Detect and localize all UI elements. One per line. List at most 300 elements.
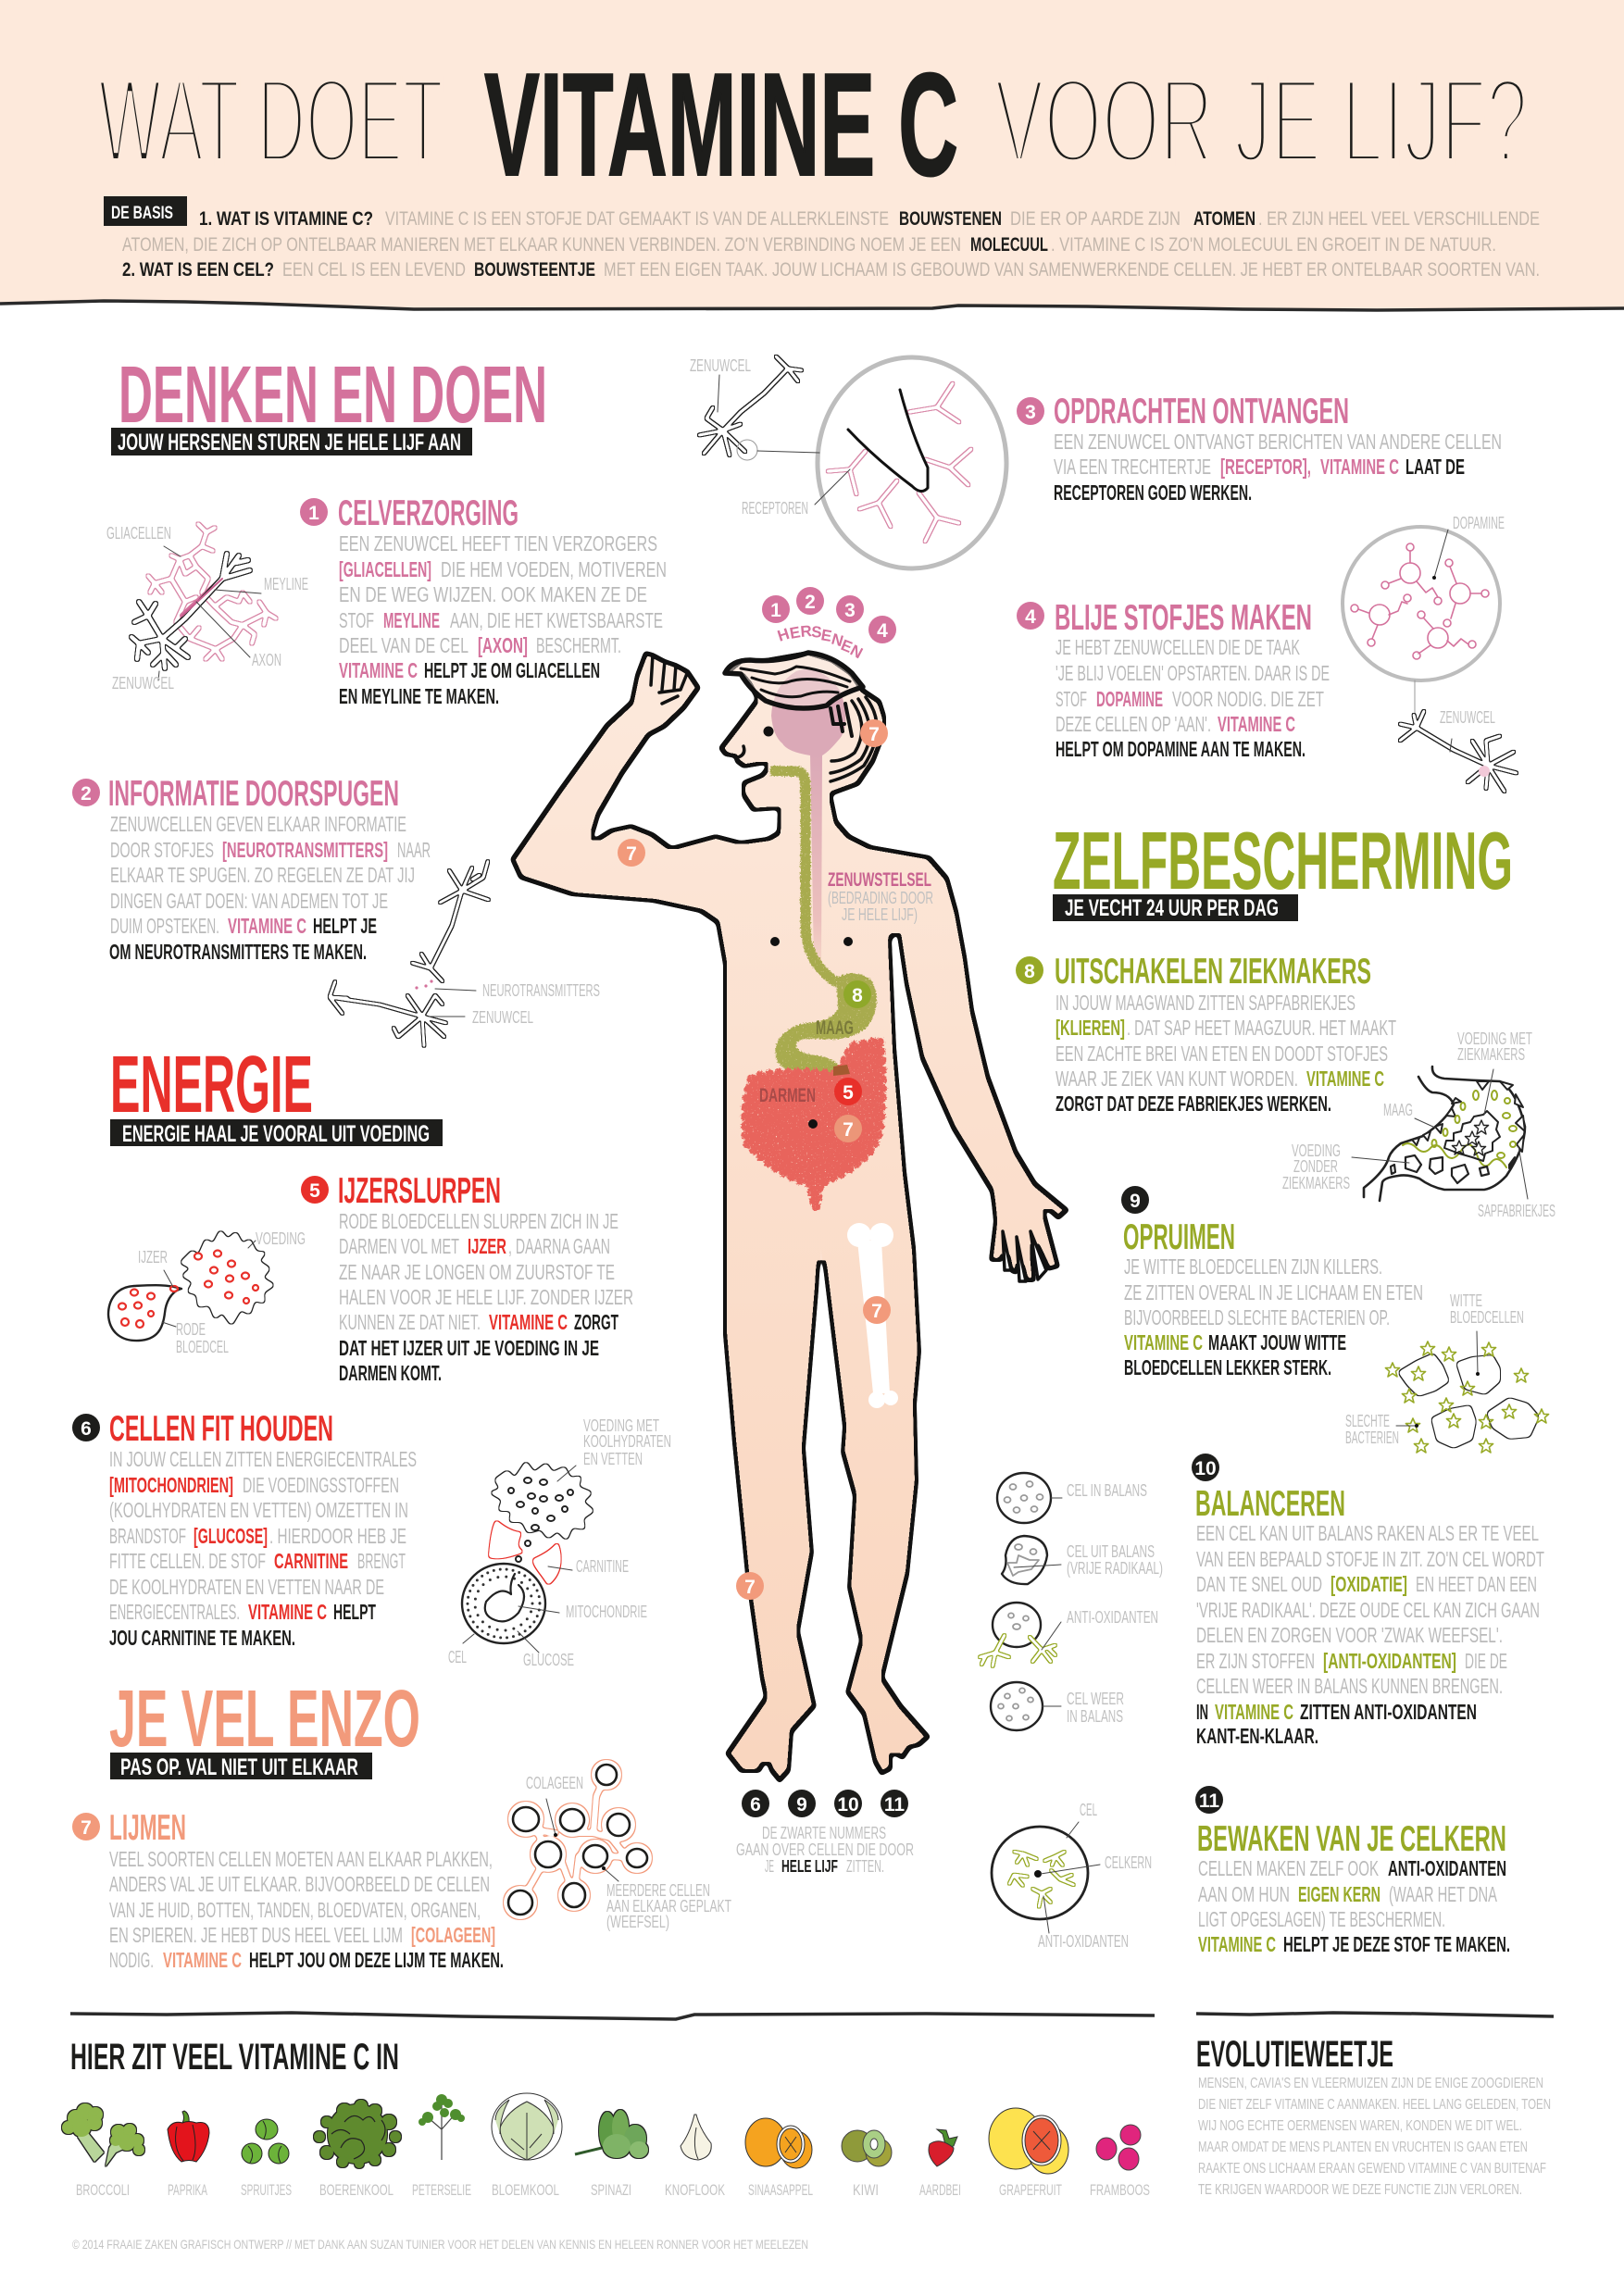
- labels: opruimen: SLECHTE: [1345, 1412, 1390, 1430]
- text: celverzorging: EN MEYLINE TE MAKEN.: [339, 684, 499, 708]
- intro: de basis: 2. WAT IS EEN CEL?: [122, 259, 274, 281]
- labels: celkern: CEL: [1080, 1801, 1097, 1819]
- text: cellen fit houden: HELPT: [333, 1600, 376, 1624]
- leg bone: [847, 1223, 898, 1408]
- heading: uitschakelen ziekmakers: UITSCHAKELEN ZIEKMAKERS: [1055, 952, 1371, 992]
- body labels: MAAG: [816, 1017, 854, 1039]
- heading: lijmen: LIJMEN: [109, 1808, 186, 1848]
- labels: balans cellen: CEL UIT BALANS: [1067, 1542, 1155, 1561]
- text: cellen fit houden: [109, 1447, 417, 1650]
- text: opdrachten ontvangen: VIA EEN TRECHTERTJE: [1054, 455, 1211, 479]
- text: ijzerslurpen: KUNNEN ZE DAT NIET.: [339, 1310, 481, 1334]
- heading: opdrachten ontvangen: OPDRACHTEN ONTVANGEN: [1054, 392, 1349, 431]
- text: balanceren: IN: [1196, 1700, 1208, 1724]
- icon: witte bloedcellen en bacterien: [1385, 1331, 1549, 1453]
- text: informatie doorspugen: OM NEUROTRANSMITTERS TE MAKEN.: [109, 940, 367, 964]
- badge 8: [1016, 956, 1043, 984]
- food: knoflook: [681, 2115, 711, 2160]
- text: cellen fit houden: [MITOCHONDRIEN]: [109, 1473, 233, 1497]
- intro: de basis: . ER ZIJN HEEL VEEL VERSCHILLENDE: [1258, 208, 1540, 230]
- text: balanceren: [1196, 1521, 1544, 1748]
- heading: je vel enzo: [109, 1674, 420, 1780]
- labels: celkern: [1038, 1801, 1152, 1951]
- heading: evolutieweetje: EVOLUTIEWEETJE: [1196, 2034, 1393, 2075]
- heading: energie: ENERGIE: [110, 1040, 313, 1129]
- panel: 4 blije stofjes maken: [1017, 514, 1517, 792]
- labels: lijmen: AAN ELKAAR GEPLAKT: [606, 1897, 731, 1915]
- text: ijzerslurpen: [339, 1209, 633, 1385]
- text: cellen fit houden: IN JOUW CELLEN ZITTEN ENERGIECENTRALES: [109, 1447, 417, 1471]
- heading: je vel enzo: PAS OP. VAL NIET UIT ELKAAR: [120, 1754, 358, 1780]
- text: ijzerslurpen: , DAARNA GAAN: [508, 1234, 610, 1258]
- text: lijmen: [COLAGEEN]: [411, 1923, 495, 1947]
- copyright: © 2014 FRAAIE ZAKEN GRAFISCH ONTWERP // MET DANK AAN SUZAN TUINIER VOOR HET DELEN VAN KENNIS EN HELEEN RONNER VOOR HET MEELEZEN: [72, 2237, 808, 2252]
- text: lijmen: [109, 1847, 504, 1972]
- text: opruimen: ZE ZITTEN OVERAL IN JE LICHAAM EN ETEN: [1124, 1280, 1423, 1304]
- heading: denken en doen: JOUW HERSENEN STUREN JE HELE LIJF AAN: [118, 430, 461, 455]
- badge 4: [1017, 602, 1044, 630]
- labels: lijmen: [526, 1774, 731, 1931]
- text: celverzorging: AAN, DIE HET KWETSBAARSTE: [450, 608, 663, 632]
- body labels: ZENUWSTELSEL: [828, 869, 931, 891]
- panel: hier zit veel vitamine c in: [62, 2013, 1155, 2199]
- text: ijzerslurpen: HALEN VOOR JE HELE LIJF. ZONDER IJZER: [339, 1285, 633, 1309]
- text: uitschakelen ziekmakers: IN JOUW MAAGWAND ZITTEN SAPFABRIEKJES: [1056, 991, 1355, 1015]
- heading: denken en doen: DENKEN EN DOEN: [119, 350, 547, 440]
- badges on body: 5: [843, 1082, 854, 1104]
- badge 11: 11: [1199, 1791, 1219, 1812]
- labels: neurotransmitters, zenuwcel: NEUROTRANSMITTERS: [482, 981, 600, 1000]
- food labels: PAPRIKA: [168, 2181, 207, 2199]
- text: cellen fit houden: DIE VOEDINGSSTOFFEN: [243, 1473, 399, 1497]
- hersenen badges: 2: [805, 592, 816, 613]
- heading: ijzerslurpen: IJZERSLURPEN: [338, 1171, 501, 1211]
- food: aardbei: [929, 2129, 957, 2166]
- badge 7: 7: [81, 1817, 92, 1839]
- text: ijzerslurpen: IJZER: [468, 1234, 506, 1258]
- text: lijmen: VEEL SOORTEN CELLEN MOETEN AAN ELKAAR PLAKKEN,: [109, 1847, 493, 1871]
- food labels: KIWI: [853, 2181, 879, 2199]
- text: balanceren: ER ZIJN STOFFEN: [1196, 1649, 1315, 1673]
- labels: maag: ZONDER: [1293, 1157, 1338, 1176]
- text: informatie doorspugen: ZENUWCELLEN GEVEN ELKAAR INFORMATIE: [110, 812, 406, 836]
- badge 11: [1195, 1786, 1223, 1814]
- labels: ijzerslurpen: BLOEDCEL: [176, 1338, 229, 1356]
- badge 7: [72, 1813, 100, 1841]
- text: lijmen: ANDERS VAL JE UIT ELKAAR. BIJVOORBEELD DE CELLEN: [109, 1872, 490, 1896]
- black number legend: DE ZWARTE NUMMERS: [762, 1824, 886, 1842]
- icon: dopamine en zenuwcel: [1343, 527, 1517, 792]
- food labels: AARDBEI: [919, 2181, 961, 2199]
- text: opdrachten ontvangen: RECEPTOREN GOED WERKEN.: [1054, 480, 1252, 505]
- labels: neurotransmitters, zenuwcel: [472, 981, 600, 1027]
- badges on body: 7: [868, 724, 880, 745]
- labels: cellen fit houden: CARNITINE: [576, 1557, 629, 1576]
- text: balanceren: [ANTI-OXIDANTEN]: [1323, 1649, 1456, 1673]
- labels: ijzerslurpen: VOEDING: [256, 1229, 306, 1248]
- food labels: BOERENKOOL: [319, 2181, 394, 2199]
- badges on body: 8: [852, 985, 863, 1006]
- body labels: DARMEN: [759, 1085, 816, 1106]
- food labels: PETERSELIE: [412, 2181, 471, 2199]
- labels: cellen fit houden: GLUCOSE: [523, 1651, 574, 1669]
- title: [98, 44, 1528, 206]
- labels: ijzerslurpen: [138, 1229, 306, 1356]
- text: uitschakelen ziekmakers: [1056, 991, 1396, 1116]
- text: blije stofjes maken: 'JE BLIJ VOELEN' OPSTARTEN. DAAR IS DE: [1056, 661, 1330, 685]
- text: uitschakelen ziekmakers: . DAT SAP HEET MAAGZUUR. HET MAAKT: [1127, 1016, 1396, 1040]
- badges on body: [618, 719, 891, 1600]
- food: boerenkool: [314, 2100, 401, 2168]
- food labels: FRAMBOOS: [1090, 2181, 1150, 2199]
- text: cellen fit houden: JOU CARNITINE TE MAKEN.: [109, 1626, 295, 1650]
- badges on body: 7: [744, 1577, 756, 1598]
- heading: celverzorging: CELVERZORGING: [338, 493, 518, 533]
- text: celverzorging: [GLIACELLEN]: [339, 557, 431, 581]
- text: cellen fit houden: ENERGIECENTRALES.: [109, 1600, 240, 1624]
- intro: de basis: EEN CEL IS EEN LEVEND: [282, 259, 466, 281]
- text: balanceren: ZITTEN ANTI-OXIDANTEN: [1300, 1700, 1477, 1724]
- text: uitschakelen ziekmakers: [KLIEREN]: [1056, 1016, 1125, 1040]
- text: informatie doorspugen: DUIM OPSTEKEN.: [110, 914, 219, 938]
- text: celverzorging: DIE HEM VOEDEN, MOTIVEREN: [441, 557, 667, 581]
- labels: opruimen: WITTE: [1450, 1292, 1482, 1310]
- text: celverzorging: EEN ZENUWCEL HEEFT TIEN VERZORGERS: [339, 531, 657, 555]
- hair: [725, 653, 877, 781]
- heading: informatie doorspugen: INFORMATIE DOORSPUGEN: [108, 774, 399, 814]
- black number legend: GAAN OVER CELLEN DIE DOOR: [736, 1841, 914, 1859]
- badge 1: 1: [308, 503, 319, 524]
- food labels: BROCCOLI: [76, 2181, 130, 2199]
- food: sinaasappel: [745, 2118, 812, 2168]
- text: celverzorging: DEEL VAN DE CEL: [339, 633, 468, 657]
- food: paprika: [168, 2111, 209, 2162]
- text: blije stofjes maken: [1056, 635, 1330, 761]
- panel: evolutieweetje: [1196, 2013, 1554, 2198]
- panel: 1 celverzorging: [106, 493, 667, 708]
- finger gaps: [1003, 1231, 1046, 1281]
- face details and fist lines: [651, 655, 853, 1129]
- food labels: KNOFLOOK: [665, 2181, 725, 2199]
- brain and spinal cord: [771, 669, 845, 963]
- hersenen badges: 1: [770, 600, 781, 621]
- badge 2: 2: [81, 783, 92, 805]
- text: opdrachten ontvangen: [1054, 430, 1502, 505]
- labels: maag: SAPFABRIEKJES: [1478, 1202, 1555, 1220]
- labels: opruimen: BACTERIEN: [1345, 1429, 1399, 1447]
- text: bewaken van je celkern: ANTI-OXIDANTEN: [1388, 1856, 1506, 1880]
- text: ijzerslurpen: RODE BLOEDCELLEN SLURPEN ZICH IN JE: [339, 1209, 618, 1233]
- badge 5: 5: [309, 1180, 320, 1202]
- food labels: SPRUITJES: [241, 2181, 292, 2199]
- text: evolutieweetje: [1198, 2076, 1551, 2198]
- text: opruimen: VITAMINE C: [1124, 1330, 1203, 1354]
- black number legend: 10: [837, 1794, 859, 1816]
- text: ijzerslurpen: DAT HET IJZER UIT JE VOEDING IN JE: [339, 1336, 599, 1360]
- food labels: [76, 2181, 1150, 2199]
- labels: balans cellen: ANTI-OXIDANTEN: [1067, 1608, 1158, 1627]
- labels: dopamine, zenuwcel: DOPAMINE: [1453, 514, 1505, 532]
- labels: celkern: ANTI-OXIDANTEN: [1038, 1932, 1129, 1951]
- badge 9: [1121, 1186, 1149, 1214]
- labels: lijmen: (WEEFSEL): [606, 1913, 669, 1931]
- text: balanceren: [OXIDATIE]: [1330, 1572, 1407, 1596]
- digestive tract: [770, 771, 877, 1076]
- intro: de basis: DE BASIS: [111, 204, 173, 223]
- panel: 9 opruimen: [1121, 1186, 1549, 1453]
- badge 8: 8: [1024, 961, 1035, 982]
- labels: celkern: CELKERN: [1105, 1853, 1152, 1872]
- icon: maag: [1352, 1067, 1528, 1201]
- text: balanceren: EN HEET DAN EEN: [1416, 1572, 1537, 1596]
- badge 6: [72, 1414, 100, 1441]
- text: ijzerslurpen: ZORGT: [574, 1310, 618, 1334]
- text: cellen fit houden: (KOOLHYDRATEN EN VETTEN) OMZETTEN IN: [109, 1498, 408, 1522]
- badge 6: 6: [81, 1418, 92, 1440]
- labels: celverzorging: AXON: [252, 651, 281, 669]
- food: broccoli: [62, 2103, 144, 2166]
- black number legend: 6: [750, 1794, 761, 1816]
- panel: 5 ijzerslurpen: [108, 1171, 633, 1385]
- text: bewaken van je celkern: [1198, 1856, 1510, 1956]
- labels: receptoren: ZENUWCEL: [690, 356, 751, 375]
- labels: opruimen: BLOEDCELLEN: [1450, 1308, 1524, 1327]
- hersenen badges: 3: [844, 600, 856, 621]
- labels: celverzorging: ZENUWCEL: [112, 674, 174, 693]
- text: informatie doorspugen: DOOR STOFJES: [110, 838, 214, 862]
- heading: blije stofjes maken: BLIJE STOFJES MAKEN: [1055, 598, 1312, 638]
- labels: lijmen: COLAGEEN: [526, 1774, 583, 1792]
- header band: [0, 0, 1624, 310]
- food: bloemkool: [492, 2093, 562, 2160]
- text: blije stofjes maken: STOF: [1056, 687, 1087, 711]
- intro: de basis: 1. WAT IS VITAMINE C?: [199, 208, 373, 230]
- text: informatie doorspugen: VITAMINE C: [228, 914, 306, 938]
- body labels: [759, 869, 933, 1106]
- labels: balans cellen: (VRIJE RADIKAAL): [1067, 1559, 1163, 1578]
- badge 3: 3: [1025, 402, 1036, 423]
- labels: celverzorging: [106, 524, 308, 693]
- labels: cellen fit houden: MITOCHONDRIE: [566, 1603, 647, 1621]
- labels: receptoren: [690, 356, 808, 518]
- heading: cellen fit houden: CELLEN FIT HOUDEN: [109, 1409, 333, 1449]
- labels: maag: VOEDING MET: [1457, 1029, 1532, 1048]
- labels: cellen fit houden: EN VETTEN: [583, 1450, 643, 1468]
- hersenen badges: 4: [877, 620, 888, 642]
- text: opdrachten ontvangen: [RECEPTOR],: [1220, 455, 1311, 479]
- labels: cellen fit houden: CEL: [448, 1648, 467, 1666]
- labels: balans cellen: IN BALANS: [1067, 1707, 1123, 1726]
- black number legend: JE: [765, 1857, 774, 1876]
- food labels: SINAASAPPEL: [748, 2181, 813, 2199]
- badges on body: 7: [626, 843, 637, 865]
- hersenen badges: HERSENEN: [775, 622, 866, 662]
- intro: de basis: . VITAMINE C IS ZO'N MOLECUUL EN GROEIT IN DE NATUUR.: [1051, 234, 1496, 256]
- badge 3: [1017, 397, 1044, 425]
- text: celverzorging: HELPT JE OM GLIACELLEN: [424, 658, 600, 682]
- panel: 2 informatie doorspugen: [72, 774, 600, 1046]
- text: uitschakelen ziekmakers: EEN ZACHTE BREI VAN ETEN EN DOODT STOFJES: [1056, 1042, 1388, 1066]
- text: bewaken van je celkern: AAN OM HUN: [1198, 1882, 1290, 1906]
- text: balanceren: VITAMINE C: [1215, 1700, 1293, 1724]
- text: blije stofjes maken: HELPT OM DOPAMINE AAN TE MAKEN.: [1056, 737, 1305, 761]
- black number legend: HELE LIJF: [781, 1857, 838, 1876]
- labels: ijzerslurpen: IJZER: [138, 1248, 168, 1267]
- text: blije stofjes maken: VITAMINE C: [1218, 712, 1295, 736]
- labels: balans cellen: CEL IN BALANS: [1067, 1481, 1147, 1500]
- text: cellen fit houden: . HIERDOOR HEB JE: [269, 1524, 406, 1548]
- text: cellen fit houden: VITAMINE C: [248, 1600, 327, 1624]
- labels: receptoren: RECEPTOREN: [742, 499, 808, 518]
- text: blije stofjes maken: DOPAMINE: [1096, 687, 1163, 711]
- intro: de basis: [104, 196, 1540, 281]
- badge 5: [301, 1176, 329, 1204]
- icon: cellen aan elkaar geplakt: [506, 1763, 649, 1916]
- text: cellen fit houden: DE KOOLHYDRATEN EN VETTEN NAAR DE: [109, 1575, 384, 1599]
- food: spinazi: [575, 2110, 648, 2158]
- text: informatie doorspugen: [NEUROTRANSMITTERS]: [222, 838, 388, 862]
- text: cellen fit houden: FITTE CELLEN. DE STOF: [109, 1549, 266, 1573]
- body labels: JE HELE LIJF): [842, 905, 918, 924]
- labels: cellen fit houden: [448, 1416, 671, 1669]
- panel: 10 balanceren: [980, 1454, 1544, 1748]
- text: lijmen: VITAMINE C: [163, 1948, 242, 1972]
- labels: dopamine, zenuwcel: ZENUWCEL: [1440, 708, 1495, 727]
- title: WAT DOET: [98, 53, 443, 188]
- body labels: (BEDRADING DOOR: [828, 889, 933, 907]
- badges on body: 7: [843, 1119, 854, 1141]
- black number legend: 11: [884, 1794, 905, 1816]
- food: spruitjes: [242, 2119, 289, 2164]
- intestines: [745, 1041, 882, 1208]
- heading: balanceren: BALANCEREN: [1195, 1484, 1345, 1524]
- text: cellen fit houden: BRENGT: [357, 1549, 406, 1573]
- food labels: SPINAZI: [591, 2181, 631, 2199]
- text: opruimen: JE WITTE BLOEDCELLEN ZIJN KILLERS.: [1124, 1254, 1382, 1279]
- text: blije stofjes maken: DEZE CELLEN OP 'AAN'.: [1056, 712, 1211, 736]
- text: celverzorging: MEYLINE: [383, 608, 440, 632]
- text: informatie doorspugen: [109, 812, 431, 964]
- text: uitschakelen ziekmakers: VITAMINE C: [1306, 1067, 1384, 1091]
- panel: 8 uitschakelen ziekmakers: [1016, 952, 1555, 1220]
- panel: 7 lijmen: [72, 1763, 731, 1972]
- icon: rode bloedcel en voeding: [108, 1229, 275, 1341]
- black number legend: 9: [796, 1794, 807, 1816]
- text: balanceren: KANT-EN-KLAAR.: [1196, 1724, 1318, 1748]
- heading: energie: ENERGIE HAAL JE VOORAL UIT VOEDING: [122, 1121, 430, 1147]
- black number legend: ZITTEN.: [846, 1857, 884, 1876]
- text: lijmen: HELPT JOU OM DEZE LIJM TE MAKEN.: [249, 1948, 504, 1972]
- intro: de basis: BOUWSTENEN: [899, 208, 1002, 230]
- heading: opruimen: OPRUIMEN: [1123, 1217, 1235, 1257]
- panel: 11 bewaken van je celkern: [992, 1786, 1510, 1956]
- text: informatie doorspugen: HELPT JE: [313, 914, 377, 938]
- heading: hier zit veel vitamine c in: HIER ZIT VEEL VITAMINE C IN: [70, 2037, 399, 2078]
- text: uitschakelen ziekmakers: ZORGT DAT DEZE FABRIEKJES WERKEN.: [1056, 1092, 1331, 1116]
- food: kiwi: [842, 2130, 892, 2166]
- labels: cellen fit houden: VOEDING MET: [583, 1416, 659, 1435]
- text: ijzerslurpen: DARMEN KOMT.: [339, 1361, 442, 1385]
- text: opdrachten ontvangen: VITAMINE C: [1320, 455, 1399, 479]
- labels: neurotransmitters, zenuwcel: ZENUWCEL: [472, 1008, 533, 1027]
- heading: denken en doen: [111, 350, 547, 455]
- labels: lijmen: MEERDERE CELLEN: [606, 1881, 710, 1900]
- intro: de basis: VITAMINE C IS EEN STOFJE DAT GEMAAKT IS VAN DE ALLERKLEINSTE: [385, 208, 889, 230]
- badges on body: 7: [871, 1301, 882, 1322]
- text: bewaken van je celkern: EIGEN KERN: [1298, 1882, 1380, 1906]
- heading: je vel enzo: JE VEL ENZO: [109, 1674, 420, 1764]
- text: bewaken van je celkern: (WAAR HET DNA: [1389, 1882, 1497, 1906]
- text: opruimen: [1124, 1254, 1423, 1379]
- labels: maag: ZIEKMAKERS: [1282, 1174, 1350, 1192]
- text: bewaken van je celkern: HELPT JE DEZE STOF TE MAKEN.: [1283, 1932, 1510, 1956]
- text: informatie doorspugen: NAAR: [397, 838, 431, 862]
- text: balanceren: DIE DE: [1465, 1649, 1507, 1673]
- text: blije stofjes maken: VOOR NODIG. DIE ZET: [1172, 687, 1324, 711]
- badge 1: [300, 498, 328, 526]
- food labels: GRAPEFRUIT: [999, 2181, 1062, 2199]
- badge 4: 4: [1025, 606, 1036, 628]
- food: peterselie: [418, 2094, 465, 2160]
- intro: de basis: MOLECUUL: [970, 234, 1048, 256]
- intro: de basis: BOUWSTEENTJE: [474, 259, 595, 281]
- food: framboos: [1096, 2125, 1141, 2170]
- text: bewaken van je celkern: CELLEN MAKEN ZELF OOK: [1198, 1856, 1379, 1880]
- text: ijzerslurpen: ZE NAAR JE LONGEN OM ZUURSTOF TE: [339, 1260, 615, 1284]
- text: blije stofjes maken: JE HEBT ZENUWCELLEN DIE DE TAAK: [1056, 635, 1300, 659]
- text: bewaken van je celkern: LIGT OPGESLAGEN) TE BESCHERMEN.: [1198, 1907, 1445, 1931]
- labels: opruimen: [1345, 1292, 1524, 1447]
- text: ijzerslurpen: DARMEN VOL MET: [339, 1234, 459, 1258]
- badge 10: [1192, 1454, 1219, 1481]
- labels: maag: ZIEKMAKERS: [1457, 1045, 1525, 1064]
- text: balanceren: DAN TE SNEL OUD: [1196, 1572, 1322, 1596]
- panel: 3 opdrachten ontvangen: [690, 356, 1502, 568]
- text: informatie doorspugen: DINGEN GAAT DOEN: VAN ADEMEN TOT JE: [110, 889, 388, 913]
- icon: zenuwcel met gliacellen: [131, 524, 276, 680]
- text: opdrachten ontvangen: LAAT DE: [1405, 455, 1465, 479]
- text: opruimen: MAAKT JOUW WITTE: [1208, 1330, 1346, 1354]
- text: celverzorging: VITAMINE C: [339, 658, 418, 682]
- text: cellen fit houden: [GLUCOSE]: [194, 1524, 268, 1548]
- badge 9: 9: [1130, 1191, 1141, 1212]
- text: celverzorging: [AXON]: [478, 633, 528, 657]
- text: celverzorging: STOF: [339, 608, 374, 632]
- text: cellen fit houden: CARNITINE: [274, 1549, 348, 1573]
- icon: cel, mitochondrie, carnitine: [462, 1461, 594, 1653]
- text: lijmen: EN SPIEREN. JE HEBT DUS HEEL VEEL LIJM: [109, 1923, 403, 1947]
- text: opruimen: BIJVOORBEELD SLECHTE BACTERIEN OP.: [1124, 1305, 1390, 1329]
- text: celverzorging: BESCHERMT.: [536, 633, 621, 657]
- badge 10: 10: [1194, 1458, 1217, 1479]
- text: opruimen: BLOEDCELLEN LEKKER STERK.: [1124, 1355, 1331, 1379]
- labels: maag: MAAG: [1383, 1101, 1413, 1119]
- text: ijzerslurpen: VITAMINE C: [489, 1310, 568, 1334]
- labels: ijzerslurpen: RODE: [176, 1320, 206, 1339]
- intro: de basis: ATOMEN, DIE ZICH OP ONTELBAAR MANIEREN MET ELKAAR KUNNEN VERBINDEN. ZO'N VERBINDING NOEM JE EEN: [122, 234, 961, 256]
- icon: twee zenuwcellen: [330, 861, 489, 1046]
- food labels: BLOEMKOOL: [492, 2181, 559, 2199]
- title: VITAMINE C: [484, 44, 958, 206]
- labels: dopamine, zenuwcel: [1440, 514, 1505, 727]
- text: celverzorging: [339, 531, 667, 708]
- food: grapefruit: [989, 2108, 1068, 2174]
- black number legend: [736, 1790, 914, 1876]
- body figure: [512, 653, 1068, 1781]
- text: bewaken van je celkern: VITAMINE C: [1198, 1932, 1276, 1956]
- icon: cel in balans tot cel weer in balans: [980, 1473, 1062, 1730]
- text: lijmen: NODIG.: [109, 1948, 154, 1972]
